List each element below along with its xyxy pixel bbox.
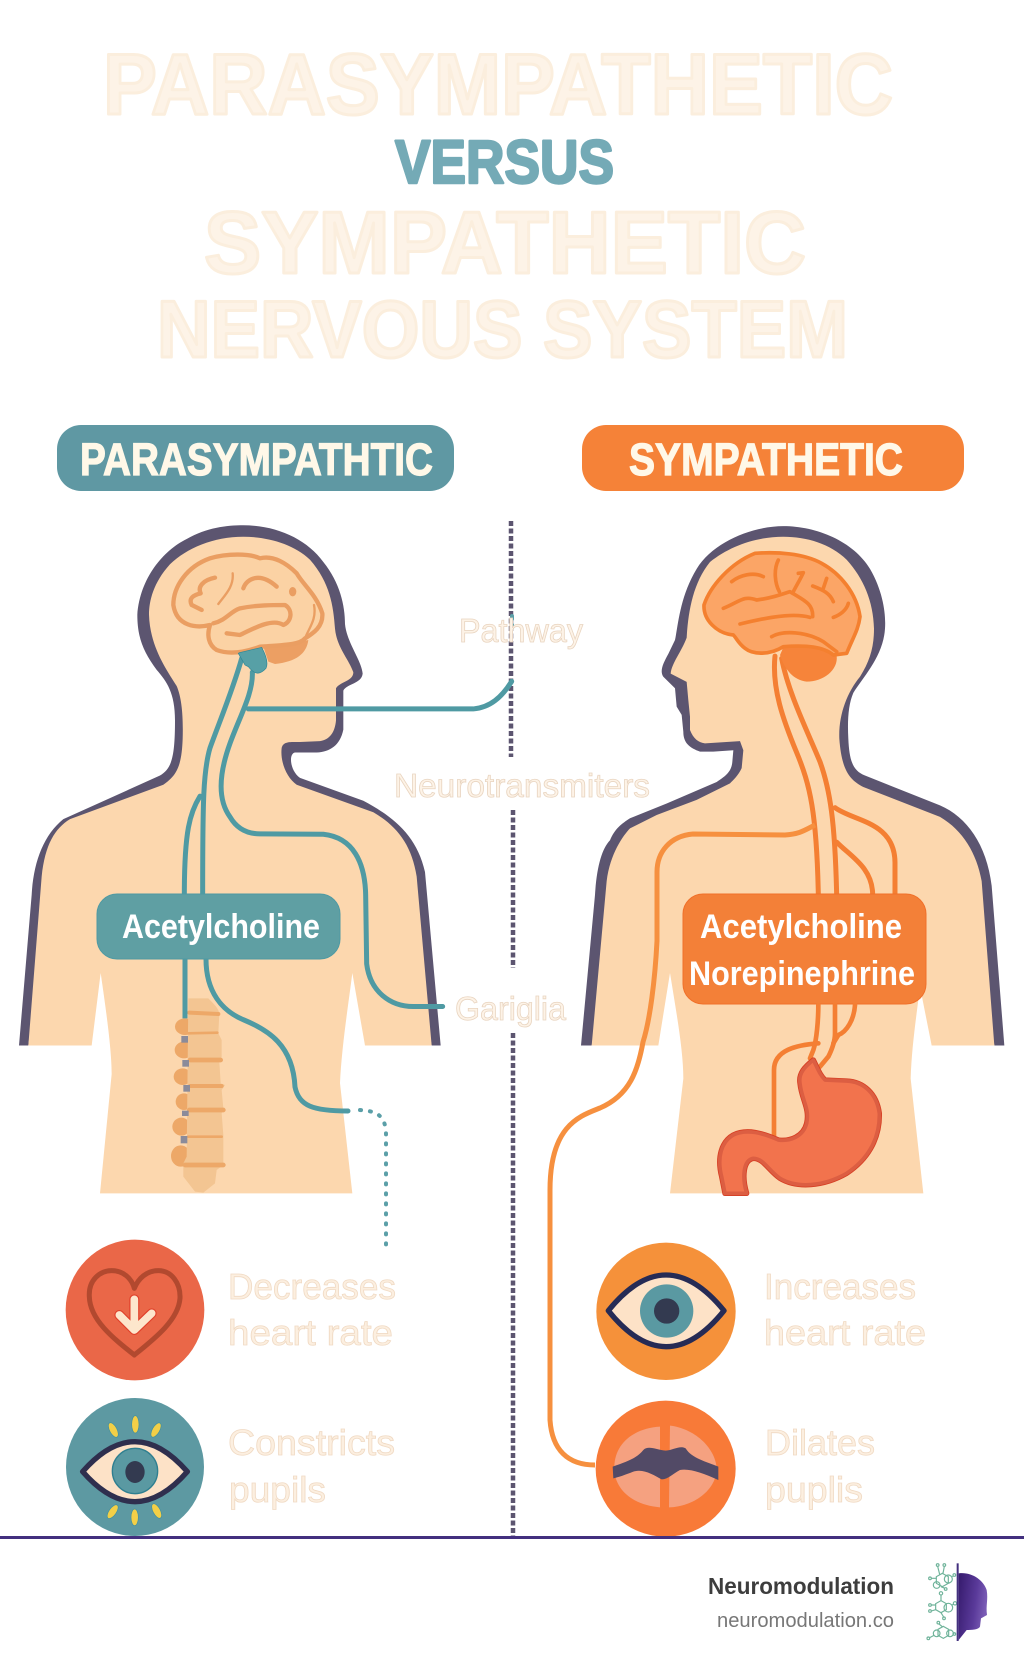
effect text: increases heart rate: [764, 1266, 926, 1353]
logo: [927, 1563, 987, 1641]
center divider: [511, 521, 513, 1536]
label: pathway: Pathway: [459, 612, 583, 649]
label: ganglia: Gariglia: [455, 990, 567, 1027]
icon: constricted eye: [66, 1398, 204, 1536]
left effects: [66, 1240, 204, 1536]
effect text: decreases heart rate: [228, 1266, 396, 1353]
heading: sympathetic pill: [582, 425, 964, 491]
body skin left: [28, 537, 432, 1193]
long nerve to effector: [550, 825, 815, 1465]
abdominal nerve left: [206, 959, 348, 1111]
effect text: increases heart rate: heart rate: [764, 1312, 926, 1353]
neurotransmitter box: acetylcholine and norepinephrine: Acetylcholine: [700, 908, 902, 946]
title: NERVOUS SYSTEM: [157, 285, 848, 375]
body skin right: [592, 537, 994, 1193]
body outline left: [19, 525, 441, 1046]
effect text: decreases heart rate: heart rate: [228, 1312, 393, 1353]
footer rule: [0, 1536, 1024, 1539]
effect text: increases heart rate: Increases: [764, 1266, 916, 1307]
body outline right: [581, 526, 1004, 1046]
title: SYMPATHETIC: [204, 193, 806, 292]
icon: heart rate down: [66, 1240, 204, 1380]
neurotransmitter box: acetylcholine and norepinephrine: Norepinephrine: [689, 955, 915, 993]
effect text: dilates puplis: puplis: [765, 1469, 863, 1510]
parasympathetic figure: [19, 525, 512, 1193]
heading: sympathetic pill: SYMPATHETIC: [629, 434, 903, 485]
neurotransmitter box: acetylcholine and norepinephrine: [683, 894, 926, 1004]
title: [103, 37, 893, 375]
icon: eye: [596, 1243, 736, 1380]
effect text: constricts pupils: pupils: [229, 1469, 326, 1510]
footer brand text: neuromodulation.co: [717, 1610, 894, 1632]
stomach and gastric nerves: [720, 1005, 879, 1193]
icon: airways: [596, 1401, 736, 1537]
spine: [171, 958, 225, 1193]
title: PARASYMPATHETIC: [103, 37, 893, 133]
heading: parasympathetic pill: PARASYMPATHTIC: [80, 434, 433, 485]
brain right: [704, 553, 860, 682]
footer brand text: Neuromodulation: [708, 1573, 894, 1599]
neurotransmitter box: acetylcholine: Acetylcholine: [122, 908, 320, 946]
nerves right: [774, 656, 895, 895]
right effects: [596, 1243, 736, 1537]
pathway nerve end dots: [510, 616, 514, 634]
sympathetic figure: [581, 526, 1004, 1193]
neurotransmitter box: acetylcholine: [97, 894, 340, 959]
effect text: dilates puplis: Dilates: [765, 1422, 875, 1463]
effect text: dilates puplis: [765, 1422, 875, 1510]
label: neurotransmitters: Neurotransmiters: [394, 767, 650, 804]
effect text: constricts pupils: [228, 1422, 395, 1510]
effect text: constricts pupils: Constricts: [228, 1422, 395, 1463]
nerves left: [184, 658, 512, 1006]
brain left: [173, 555, 322, 673]
title: VERSUS: [395, 128, 614, 196]
effect text: decreases heart rate: Decreases: [228, 1266, 396, 1307]
footer brand text: [708, 1573, 894, 1632]
dotted nerve to effectors: [360, 1110, 386, 1247]
heading: parasympathetic pill: [57, 425, 454, 491]
